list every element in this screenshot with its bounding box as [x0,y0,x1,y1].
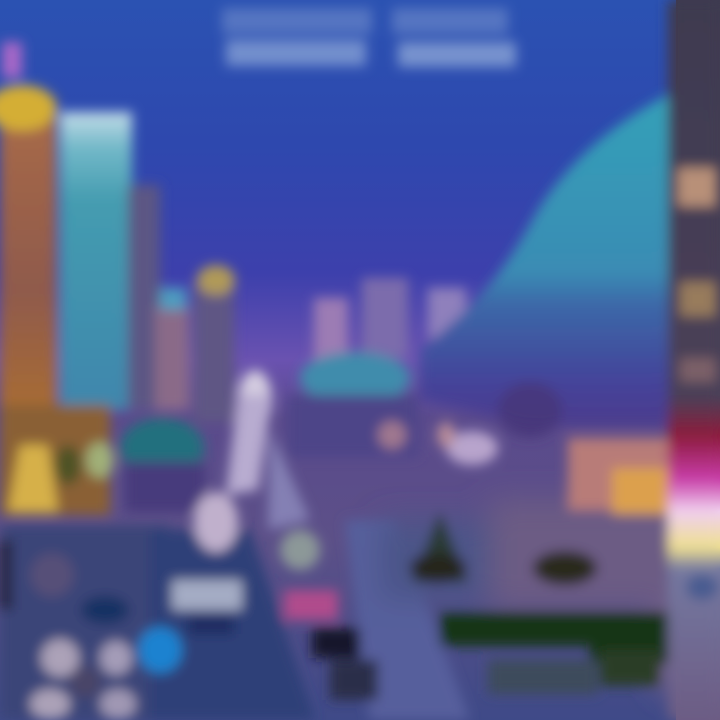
distant skyline [238,278,466,430]
domed building in mid-distance [288,352,498,465]
road light streaks [194,395,320,570]
left golden tower [0,42,57,410]
tower with yellow cap [194,265,235,422]
right strip backdrop [676,0,720,720]
white van [172,580,242,610]
street trees [410,512,597,585]
headline block (illegible, blurred) [222,8,516,67]
right vertical building strip [668,0,720,720]
left teal glass building [60,112,132,410]
right side sidewalk [380,500,720,690]
slim brown building [128,185,189,410]
teal wave building on right [420,95,668,425]
blue car [138,627,182,673]
gold base of left tower [0,405,114,515]
orange building lower right [498,382,670,514]
dark road on left [0,520,470,720]
teal dome lower left [120,418,205,512]
vehicles on road [30,580,378,719]
pink car [284,590,338,620]
white cars lower left [41,639,79,677]
green hedge [440,612,670,694]
